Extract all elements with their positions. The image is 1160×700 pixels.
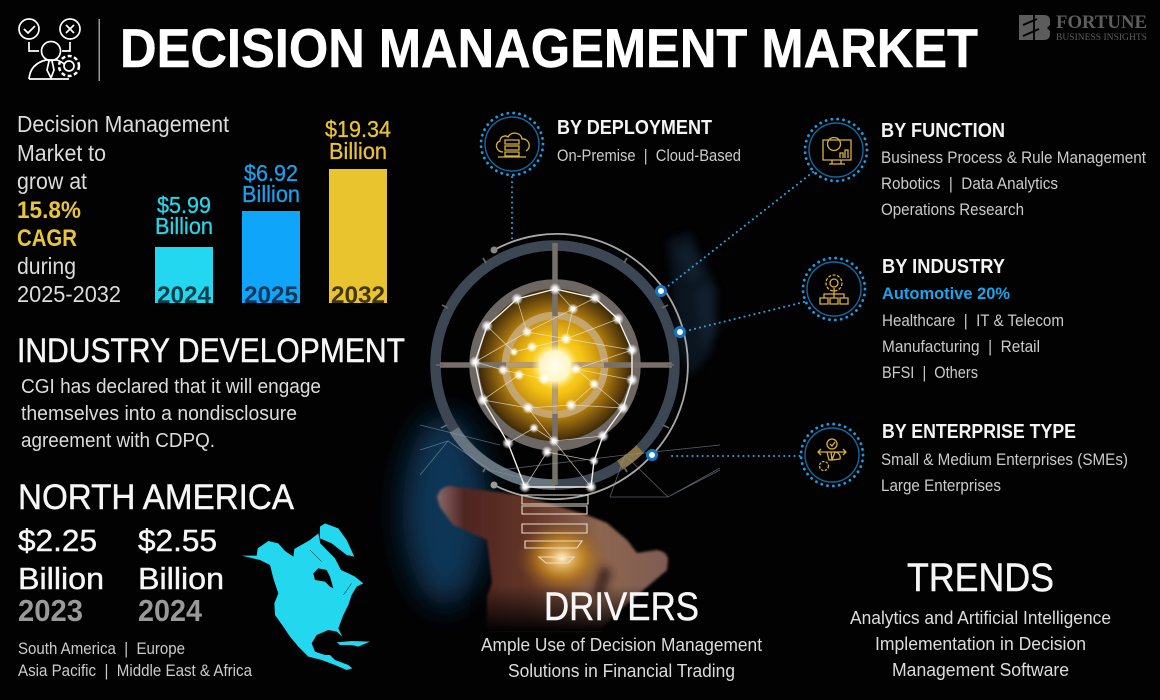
- outer faint network lines: [420, 425, 720, 497]
- value 2023: [18, 523, 104, 628]
- value 2023: $2.25: [18, 523, 97, 558]
- CAGR text block: grow at: [17, 168, 88, 194]
- blue backdrop left: [403, 415, 487, 605]
- CAGR text block: during: [17, 253, 76, 279]
- dotted connector: [672, 455, 801, 457]
- by industry: BFSI | Others: [882, 364, 978, 382]
- by function: Robotics | Data Analytics: [881, 175, 1058, 193]
- by enterprise type: [648, 421, 1128, 495]
- value 2023: 2023: [18, 593, 83, 628]
- central illustration: light bulb on hand: [403, 232, 720, 631]
- bar 2025: [242, 160, 300, 309]
- industry development: agreement with CDPQ.: [21, 430, 215, 452]
- bar 2024: Billion: [155, 213, 213, 239]
- regional: North America: [18, 478, 295, 680]
- drivers: Solutions in Financial Trading: [508, 661, 735, 681]
- regional: North America: NORTH AMERICA: [18, 478, 295, 517]
- bar 2032: 2032: [331, 282, 385, 309]
- CAGR text block: CAGR: [17, 225, 77, 252]
- bar 2025: $6.92: [244, 160, 298, 186]
- finger fold: [592, 565, 612, 597]
- by enterprise type: Small & Medium Enterprises (SMEs): [881, 451, 1128, 469]
- node: [656, 286, 666, 296]
- palm glow: [516, 520, 608, 596]
- icon: gear and hierarchy: [803, 258, 865, 320]
- bar 2024: [155, 192, 213, 309]
- by deployment: BY DEPLOYMENT: [557, 117, 712, 139]
- value 2024: 2024: [138, 593, 203, 628]
- by industry: Manufacturing | Retail: [882, 338, 1040, 356]
- logo: Fortune Business Insights: BUSINESS INSIGHTS: [1056, 33, 1147, 43]
- value 2024: $2.55: [138, 523, 217, 558]
- header icon: decision person: [19, 19, 80, 79]
- bar 2024: 2024: [157, 282, 212, 309]
- value 2023: Billion: [18, 561, 104, 596]
- map: North America: [242, 523, 370, 670]
- by deployment: [481, 113, 741, 240]
- icon: monitor charts: [805, 119, 867, 181]
- CAGR text block: 2025-2032: [17, 281, 121, 307]
- by function: BY FUNCTION: [881, 120, 1005, 142]
- trends: Implementation in Decision: [875, 634, 1086, 654]
- drivers: DRIVERS: [544, 585, 699, 629]
- by deployment: On-Premise | Cloud-Based: [557, 147, 741, 165]
- bulb wire network: [475, 289, 632, 487]
- by industry: [676, 256, 1064, 382]
- by industry: BY INDUSTRY: [882, 256, 1006, 278]
- icon: enterprise gears: [801, 424, 863, 486]
- industry development: CGI has declared that it will engage: [21, 376, 321, 398]
- trends: Analytics and Artificial Intelligence: [850, 608, 1111, 628]
- regional: North America: Asia Pacific | Middle East & Africa: [18, 662, 253, 680]
- gauge rings: [436, 234, 688, 499]
- other regions: South America | Europe: [18, 640, 185, 658]
- bar 2025: Billion: [242, 181, 300, 207]
- CAGR text block: Decision Management: [17, 111, 230, 137]
- bar 2025: 2025: [244, 282, 298, 309]
- CAGR text block: Market to: [17, 140, 106, 166]
- dotted connector: [511, 177, 513, 240]
- icon: cloud server: [481, 113, 543, 175]
- by function: Business Process & Rule Management: [881, 149, 1146, 167]
- value 2024: [138, 523, 224, 628]
- drivers: [481, 585, 762, 681]
- logo: Fortune Business Insights: [1019, 12, 1147, 43]
- by function: [656, 119, 1146, 296]
- by enterprise type: BY ENTERPRISE TYPE: [882, 421, 1076, 443]
- industry development: INDUSTRY DEVELOPMENT: [17, 332, 405, 370]
- hand: [437, 486, 680, 631]
- blue backdrop right: [668, 232, 718, 376]
- centre glow: [531, 342, 579, 390]
- industry development: [17, 332, 405, 452]
- title: DECISION MANAGEMENT MARKET: [120, 17, 978, 79]
- value 2024: Billion: [138, 561, 224, 596]
- by industry: Healthcare | IT & Telecom: [882, 312, 1064, 330]
- bar 2032: $19.34: [325, 116, 391, 142]
- logo: Fortune Business Insights: FORTUNE: [1056, 12, 1147, 33]
- header divider: [98, 19, 100, 81]
- bulb base: [522, 495, 588, 563]
- trends: [850, 556, 1111, 680]
- hand fade: [470, 585, 680, 631]
- dotted connector: [686, 302, 804, 331]
- by enterprise type: Large Enterprises: [881, 477, 1001, 495]
- by industry: Automotive 20%: [882, 284, 1010, 303]
- industry development: themselves into a nondisclosure: [21, 403, 297, 425]
- CAGR text block: 15.8%: [17, 197, 81, 224]
- CAGR text block: [17, 111, 230, 307]
- bar 2032: Billion: [329, 138, 387, 164]
- bar 2024: $5.99: [157, 192, 211, 218]
- glowing nodes: [469, 283, 638, 493]
- drivers: Ample Use of Decision Management: [481, 635, 762, 655]
- node: [676, 328, 684, 336]
- node: [648, 450, 656, 460]
- bar chart: market size: [155, 116, 391, 309]
- bar 2032: [325, 116, 391, 309]
- by function: Operations Research: [881, 201, 1024, 219]
- trends: Management Software: [892, 660, 1069, 680]
- dotted connector: [667, 172, 813, 287]
- trends: TRENDS: [907, 556, 1054, 600]
